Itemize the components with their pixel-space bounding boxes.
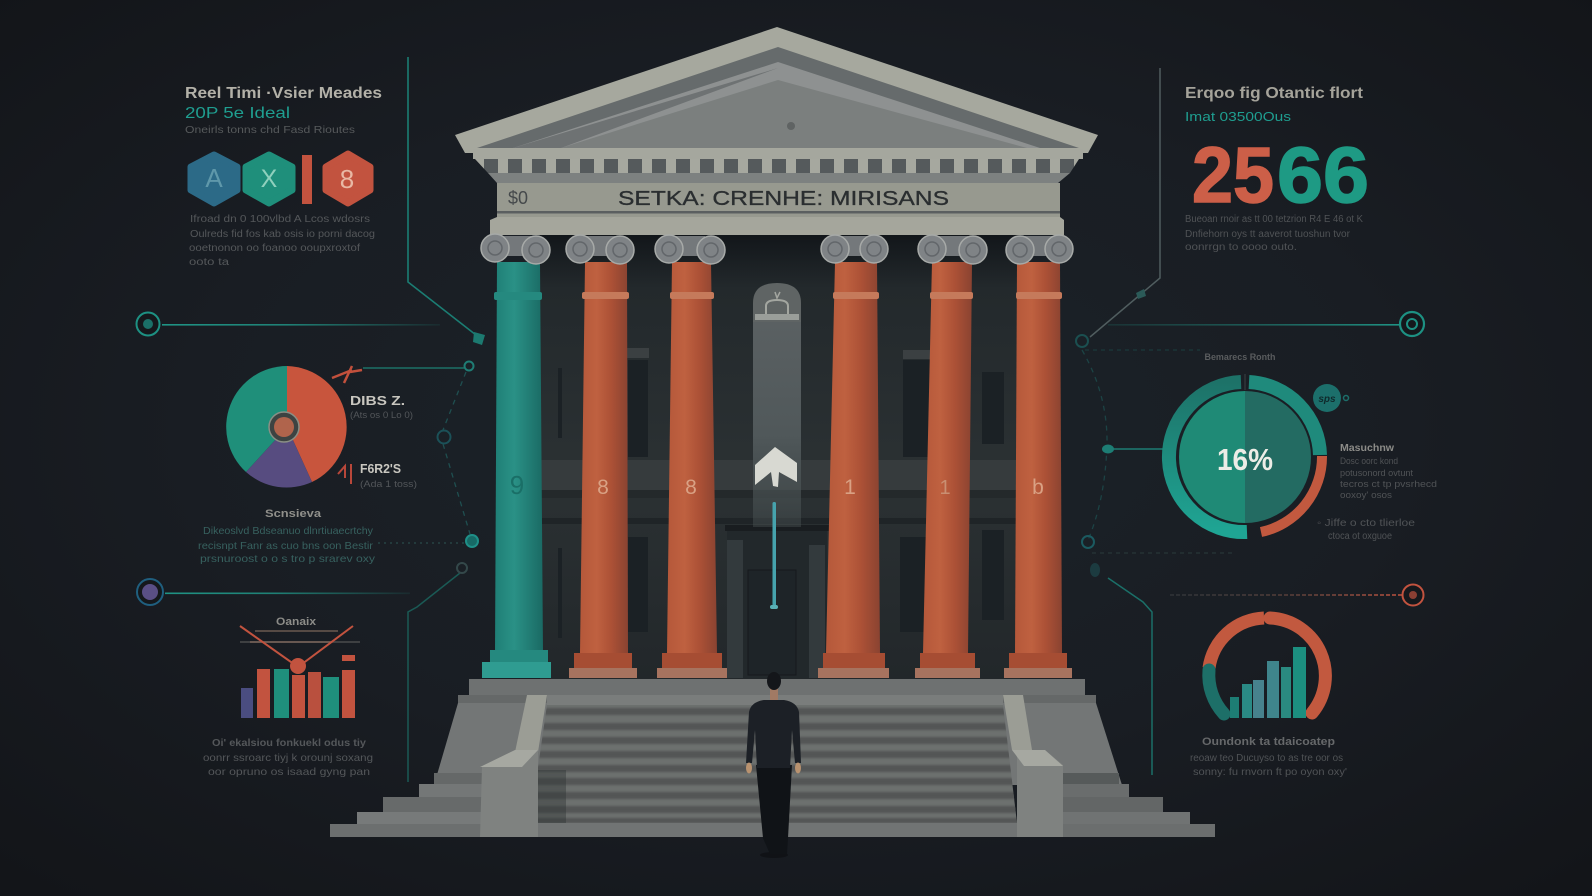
column: red 3: 8 — [685, 476, 697, 499]
figure: man from behind — [746, 672, 801, 858]
caption: Oneirls tonns chd Fasd Rioutes — [185, 124, 355, 136]
side steps left — [330, 773, 484, 837]
heading: real time: Reel Timi ·Vsier Meades — [185, 85, 382, 102]
text block: Dnfiehorn oys tt aaverot tuoshun tvor — [1185, 229, 1351, 240]
connector: top right — [1076, 68, 1400, 350]
node: top right — [1400, 312, 1424, 336]
text block: donut note: Masuchnw — [1340, 443, 1394, 454]
text block: Ifroad dn 0 100vlbd A Lcos wdosrs — [190, 214, 370, 225]
heading: Erqoo fig Otantic flort — [1185, 85, 1364, 102]
node: top left — [136, 312, 160, 336]
text block: pie description: Scnsieva — [265, 508, 322, 520]
column: red 4 — [818, 262, 889, 678]
text block: pie description: Dikeoslvd Bdseanuo dlnrtiuaecrtchy — [203, 525, 374, 537]
panel: top right stat — [1185, 85, 1369, 253]
column: red 6 — [1004, 262, 1072, 678]
text block — [1185, 214, 1363, 253]
legs — [756, 765, 792, 854]
main stairs — [520, 703, 1030, 825]
text block — [189, 214, 375, 268]
icon: red hexagon — [326, 154, 370, 203]
text block: ooetnonon oo foanoo ooupxroxtof — [189, 243, 360, 254]
temple: back wall — [540, 235, 1020, 680]
column: red 3 — [657, 262, 727, 678]
text block: bar chart description: Oi' ekalsiou fonkuekl odus tiy — [212, 737, 366, 749]
donut chart — [1169, 352, 1322, 532]
connector: lower left — [408, 563, 467, 782]
text block: gauge description: Oundonk ta tdaicoatep — [1202, 736, 1335, 748]
big number: 66 — [1277, 130, 1369, 219]
text block: donut caption: ◦ Jiffe o cto tlierloe — [1317, 518, 1416, 529]
windows — [558, 360, 1004, 638]
head — [767, 672, 781, 690]
column: red 5 — [915, 262, 980, 678]
text block: donut caption — [1317, 518, 1416, 542]
text block: pie description — [198, 508, 376, 565]
capitals — [481, 234, 1073, 264]
text block: Oulreds fid fos kab osis io porni dacog — [190, 229, 375, 240]
text block: bar chart description: oonrr ssroarc tiyj k orounj soxang — [203, 752, 373, 764]
bar chart: lower left — [240, 616, 360, 718]
text block: gauge description — [1190, 736, 1347, 778]
platform — [469, 679, 1085, 695]
column: red 2 — [569, 262, 637, 678]
pie connector — [363, 362, 478, 547]
text block: pie description: recisnpt Fanr as cuo bns oon Bestir — [198, 540, 374, 552]
column: teal: 9 — [510, 470, 524, 500]
pie label: bottom: F6R2'S — [360, 461, 401, 476]
text block: gauge description: sonny: fu rnvorn ft po oyon oxy' — [1193, 767, 1347, 778]
connector: right dashed — [1082, 350, 1235, 775]
text block: donut caption: ctoca ot oxguoe — [1328, 531, 1392, 542]
badge — [1313, 384, 1348, 412]
right ramp and block — [1003, 695, 1063, 837]
text block: pie description: prsnuroost o o s tro p srarev oxy — [200, 553, 376, 565]
text block: donut note: ooxoy' osos — [1340, 490, 1392, 501]
pie label: bottom: (Ada 1 toss) — [360, 479, 417, 489]
frieze mark: $0 — [508, 188, 528, 208]
panel: real time metrics — [185, 85, 382, 268]
pediment roof — [455, 27, 1098, 153]
text block: donut note: tecros ct tp pvsrhecd — [1340, 479, 1437, 490]
icon: green hexagon — [246, 155, 292, 203]
column: red 6: b — [1032, 476, 1044, 499]
red arc — [1261, 456, 1322, 532]
subheading: teal: 20P 5e Ideal — [185, 105, 290, 122]
column: red 4: 1 — [844, 476, 856, 499]
connector: top left — [162, 57, 485, 345]
side steps right — [1063, 773, 1215, 837]
icon: red hexagon: 8 — [340, 164, 354, 194]
badge: sps — [1318, 394, 1336, 405]
subheading: Imat 03500Ous — [1185, 109, 1292, 124]
steps and plinth — [330, 679, 1215, 837]
side slopes — [434, 703, 552, 785]
column: teal — [482, 262, 551, 678]
text block: bar chart description: oor opruno os isaad gyng pan — [208, 766, 370, 778]
node: lower left — [137, 579, 410, 605]
neck — [770, 688, 778, 700]
icon: blue hexagon — [191, 155, 237, 203]
frieze title: SETKA: CRENHE: MIRISANS — [618, 188, 949, 210]
text block: donut note: potusonord ovtunt — [1340, 468, 1413, 479]
pie label: top: DIBS Z. — [350, 393, 405, 408]
big number — [1192, 130, 1369, 219]
disc — [1179, 391, 1245, 523]
pie label: top — [332, 366, 413, 420]
pie label: bottom — [338, 461, 417, 489]
column: red 5: 1 — [939, 477, 951, 499]
hands — [746, 762, 752, 774]
door — [725, 525, 829, 678]
pie label: top: (Ats os 0 Lo 0) — [350, 410, 413, 420]
light beam and arch — [753, 283, 801, 527]
value: 16% — [1217, 442, 1273, 477]
big number: 25 — [1192, 130, 1274, 219]
top label: Bemarecs Ronth — [1204, 352, 1276, 362]
text block: bar chart description — [203, 737, 373, 778]
left ramp and block — [480, 695, 547, 837]
text block: ooto ta — [189, 257, 230, 268]
connector: lower right — [1170, 584, 1424, 606]
entablature — [473, 149, 1083, 235]
jacket — [746, 700, 801, 768]
text block: gauge description: reoaw teo Ducuyso to as tre oor os — [1190, 753, 1343, 764]
icon: up arrow — [755, 447, 797, 487]
text block: Bueoan rnoir as tt 00 tetzrion R4 E 46 ot K — [1185, 214, 1363, 225]
icon: blue hexagon: A — [205, 163, 223, 193]
teal left arc — [1169, 382, 1247, 532]
text block: donut note: Dosc oorc kond — [1340, 456, 1398, 467]
column: red 2: 8 — [597, 476, 609, 499]
gauge chart — [1209, 618, 1325, 718]
icon: green hexagon: X — [261, 165, 278, 193]
icon: red bar — [302, 155, 312, 204]
teal top arc — [1249, 382, 1320, 455]
pie chart — [226, 366, 347, 488]
teal stem — [770, 502, 778, 609]
chart title: Oanaix — [276, 616, 317, 628]
text block: donut note — [1340, 443, 1437, 501]
text block: oonrrgn to oooo outo. — [1185, 242, 1297, 253]
